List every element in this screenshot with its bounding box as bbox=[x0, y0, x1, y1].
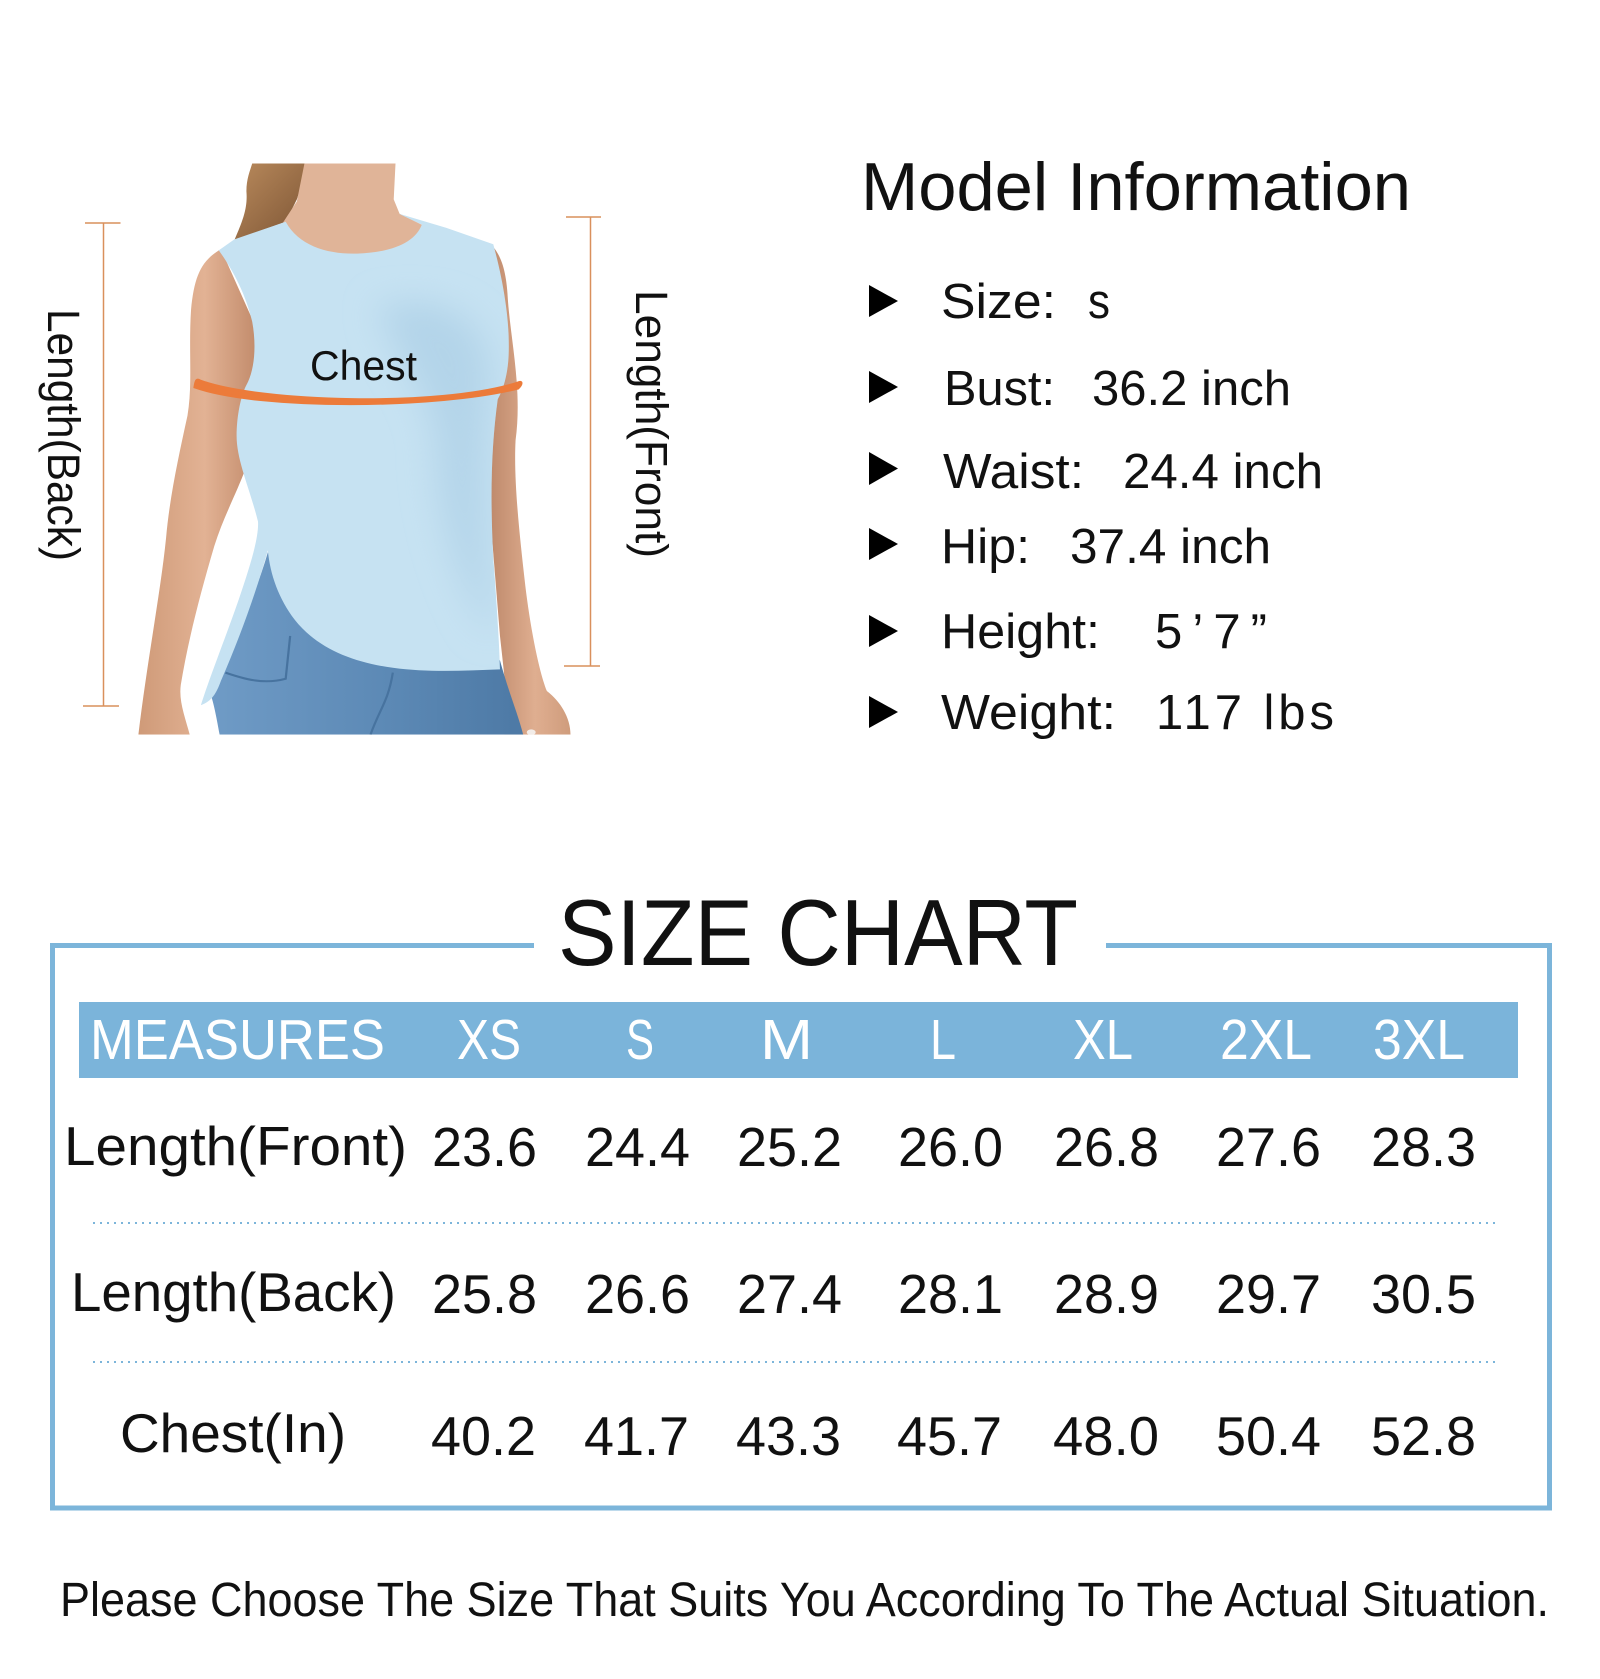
neck and chest bbox=[282, 163, 424, 261]
row: hip: Hip: bbox=[941, 520, 1030, 574]
table header: S bbox=[626, 1008, 654, 1072]
row: chest: Chest(In) bbox=[120, 1402, 346, 1464]
row: length back bbox=[71, 1261, 1476, 1325]
row: chest: 40.2 bbox=[431, 1405, 536, 1467]
row: bust: Bust: bbox=[944, 362, 1055, 416]
label: Length(Front): Length(Front) bbox=[626, 290, 677, 558]
size chart title: SIZE CHART bbox=[558, 880, 1078, 985]
row: height: 5’7” bbox=[1155, 605, 1267, 659]
leggings bbox=[211, 552, 523, 735]
row: length front bbox=[64, 1115, 1476, 1178]
label: Length(Back): Length(Back) bbox=[38, 309, 89, 561]
table header: L bbox=[930, 1008, 956, 1072]
row: length front: 24.4 bbox=[585, 1116, 690, 1178]
row: waist: Waist: bbox=[943, 445, 1084, 499]
row: size: Size: bbox=[941, 275, 1056, 329]
row: chest: 45.7 bbox=[897, 1405, 1002, 1467]
panel: garment diagram bbox=[38, 163, 677, 735]
row: weight bbox=[869, 686, 1334, 740]
row: length back: 30.5 bbox=[1371, 1263, 1476, 1325]
row: length front: Length(Front) bbox=[64, 1115, 407, 1177]
nail bbox=[527, 729, 536, 735]
bullet bbox=[869, 528, 898, 560]
tank top bbox=[201, 214, 509, 705]
row: size: s bbox=[1088, 275, 1110, 329]
heading: Model Information bbox=[861, 149, 1411, 225]
right arm bbox=[492, 248, 570, 734]
length back measure line bbox=[83, 223, 120, 706]
table header: MEASURES bbox=[90, 1008, 385, 1072]
left arm bbox=[138, 249, 259, 735]
row: weight: 117 lbs bbox=[1156, 686, 1334, 740]
photo: model wearing light blue tank bbox=[138, 163, 570, 735]
row: chest bbox=[120, 1402, 1476, 1467]
row: length front: 26.8 bbox=[1054, 1116, 1159, 1178]
row: length front: 25.2 bbox=[737, 1116, 842, 1178]
hair ponytail bbox=[234, 163, 309, 240]
row: length front: 23.6 bbox=[432, 1116, 537, 1178]
header bar bbox=[79, 1002, 1518, 1078]
row: chest: 52.8 bbox=[1371, 1405, 1476, 1467]
panel: size chart bbox=[52, 880, 1550, 1508]
row: length back: 26.6 bbox=[585, 1263, 690, 1325]
row: chest: 43.3 bbox=[736, 1405, 841, 1467]
bullet bbox=[869, 371, 898, 403]
row: bust: 36.2 inch bbox=[1092, 362, 1291, 416]
row: bust bbox=[869, 362, 1291, 416]
table header bbox=[79, 1002, 1518, 1078]
label: Chest: Chest bbox=[310, 342, 417, 389]
table header: XS bbox=[457, 1008, 521, 1072]
row: chest: 48.0 bbox=[1053, 1405, 1159, 1467]
table header: M bbox=[760, 1008, 813, 1072]
row: height bbox=[869, 605, 1267, 659]
row: size bbox=[869, 275, 1110, 329]
row: length back: 28.9 bbox=[1054, 1263, 1159, 1325]
row: length back: 28.1 bbox=[898, 1263, 1003, 1325]
bullet bbox=[869, 285, 898, 317]
bullet bbox=[869, 696, 898, 728]
length front measure line bbox=[564, 217, 601, 666]
panel: model information bbox=[861, 149, 1411, 740]
leggings pocket and seam bbox=[225, 636, 393, 735]
table header: XL bbox=[1073, 1008, 1133, 1072]
row: length back: 27.4 bbox=[737, 1263, 842, 1325]
bullet bbox=[869, 615, 898, 647]
chest measure curve bbox=[195, 380, 521, 404]
row: weight: Weight: bbox=[941, 686, 1116, 740]
row: chest: 50.4 bbox=[1216, 1405, 1321, 1467]
bullet bbox=[869, 452, 898, 485]
row: length back: Length(Back) bbox=[71, 1261, 396, 1323]
row: length front: 28.3 bbox=[1371, 1116, 1476, 1178]
row: waist bbox=[869, 445, 1323, 499]
row: waist: 24.4 inch bbox=[1123, 445, 1323, 499]
row: hip: 37.4 inch bbox=[1070, 520, 1271, 574]
chart frame bbox=[52, 946, 1550, 1508]
row: height: Height: bbox=[941, 605, 1100, 659]
table header: 2XL bbox=[1220, 1008, 1312, 1072]
row: length front: 26.0 bbox=[898, 1116, 1003, 1178]
row: chest: 41.7 bbox=[584, 1405, 689, 1467]
table header: 3XL bbox=[1373, 1008, 1465, 1072]
row: length back: 29.7 bbox=[1216, 1263, 1321, 1325]
row: length back: 25.8 bbox=[432, 1263, 537, 1325]
row: hip bbox=[869, 520, 1271, 574]
row: length front: 27.6 bbox=[1216, 1116, 1321, 1178]
